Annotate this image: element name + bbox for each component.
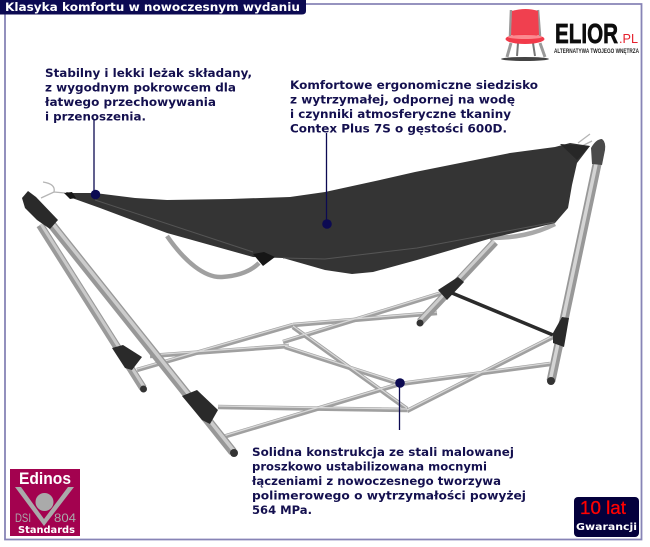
badge: Edinos DSI 804 Standards: 804 (54, 511, 76, 525)
hammock fabric (64, 143, 590, 274)
logo: Elior.pl: ELIOR (555, 18, 618, 49)
badge: Edinos DSI 804 Standards: Edinos (19, 469, 71, 488)
callout: folding lounger: z wygodnym pokrowcem dla (45, 80, 236, 94)
badge: 10 lat Gwarancji: 10 lat (580, 498, 626, 518)
badge: Edinos DSI 804 Standards: DSI (15, 511, 31, 525)
callout: seat fabric: z wytrzymałej, odpornej na wodę (290, 92, 515, 106)
callout: steel construction: łączeniami z nowoczesnego tworzywa (251, 474, 501, 488)
wire rings (41, 134, 592, 198)
callout: steel construction: polimerowego o wytrzymałości powyżej (252, 488, 526, 502)
callout: seat fabric: Komfortowe ergonomiczne siedzisko (290, 78, 538, 92)
callout: folding lounger: i przenoszenia. (45, 110, 146, 124)
callout: steel construction: proszkowo ustabilizowana mocnymi (252, 460, 487, 474)
tube end caps (140, 320, 555, 457)
callout: steel construction: 564 MPa. (252, 503, 312, 517)
badge: Edinos DSI 804 Standards: Standards (18, 525, 75, 536)
callout: folding lounger (44, 66, 252, 199)
main tubes (40, 150, 600, 452)
curved handles (167, 224, 555, 277)
badge: 10 lat Gwarancji: Gwarancji (576, 522, 637, 533)
lower struts (137, 292, 553, 437)
callout: seat fabric (290, 78, 538, 229)
logo: Elior.pl (501, 9, 640, 61)
callout: folding lounger: Stabilny i lekki leżak składany, (45, 66, 252, 80)
badge: Edinos DSI 804 Standards (10, 469, 80, 536)
callout: seat fabric: i czynniki atmosferyczne tkaniny (290, 107, 512, 121)
dark connecting bar (452, 293, 553, 335)
icon: red chair (501, 9, 549, 61)
callout: folding lounger: łatwego przechowywania (44, 95, 216, 109)
logo: Elior.pl: .PL (619, 31, 638, 46)
hammock frame (22, 134, 605, 457)
title: Klasyka komfortu w nowoczesnym wydaniu (5, 0, 300, 14)
callout: steel construction: Solidna konstrukcja ze stali malowanej (252, 445, 514, 459)
callout: seat fabric: Contex Plus 7S o gęstości 600D. (290, 122, 507, 136)
callout: steel construction (251, 378, 526, 517)
brackets (22, 139, 605, 424)
badge: 10 lat Gwarancji (574, 497, 639, 537)
